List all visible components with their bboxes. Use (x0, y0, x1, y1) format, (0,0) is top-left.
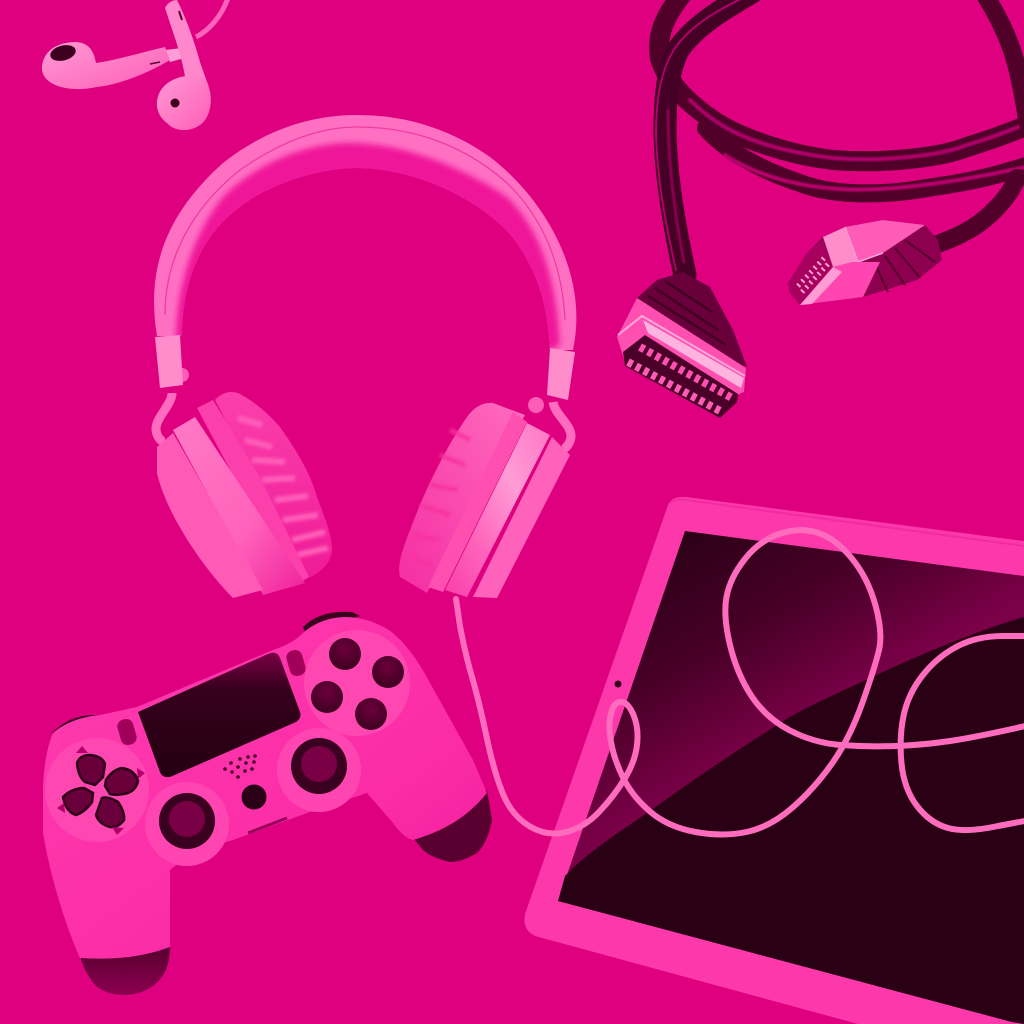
left earbud (42, 42, 192, 89)
grip tip right (413, 790, 492, 862)
left cushion (215, 392, 332, 578)
left hinge (155, 335, 189, 442)
left back plate (157, 433, 263, 598)
d-pad base (45, 738, 149, 842)
cable strand right (983, 0, 1024, 125)
plug strain relief stripes (875, 240, 935, 292)
icon: tablet (524, 497, 1024, 1024)
shoulder buttons (303, 612, 360, 632)
right hinge (528, 348, 575, 449)
plug body (617, 298, 746, 400)
left inner ring (197, 400, 309, 587)
right earbud (157, 0, 211, 130)
icon: earbuds (42, 0, 228, 130)
bottom port (248, 818, 287, 833)
right back plate (473, 437, 570, 598)
action button pad (304, 630, 410, 736)
small buttons (116, 717, 138, 747)
plug outline (788, 220, 942, 305)
icon: network plug left (617, 272, 747, 418)
plug pins base (623, 335, 738, 418)
camera (614, 680, 622, 688)
plug top (845, 220, 925, 262)
plug contacts (788, 240, 833, 305)
icon: headphones (154, 115, 576, 598)
icon: network plug right (788, 220, 942, 305)
earbud wire (196, 0, 228, 37)
plug lower face (800, 262, 880, 305)
centre button (242, 784, 266, 810)
icon: network cable coil (656, 0, 1024, 275)
icon: game controller (43, 612, 492, 995)
left cushion pleats (238, 418, 328, 555)
right mid plate (445, 423, 550, 597)
icon: headphone cable (456, 530, 1024, 834)
plug highlight strip (643, 320, 744, 388)
speaker grille (223, 754, 257, 779)
right cushion (399, 403, 525, 593)
left thumbstick (145, 782, 229, 866)
plug pins (628, 362, 722, 412)
headband (154, 115, 576, 360)
grip tip left (80, 945, 170, 995)
cable strand far left (659, 0, 1024, 161)
right thumbstick (277, 728, 361, 812)
left mid plate (173, 417, 305, 595)
d-pad arrows (57, 746, 145, 835)
screen dark reflection (558, 617, 1024, 1024)
controller body (43, 617, 487, 959)
d-pad (63, 755, 138, 827)
plug boot (637, 272, 747, 367)
headband stitching (165, 127, 565, 320)
plug clip (823, 227, 858, 267)
touchpad (138, 653, 300, 777)
right inner ring (428, 412, 527, 592)
tablet frame (524, 497, 1024, 1024)
tablet screen (558, 531, 1024, 1024)
cable strand lower (706, 128, 1024, 193)
cable strand to left plug (665, 0, 752, 275)
